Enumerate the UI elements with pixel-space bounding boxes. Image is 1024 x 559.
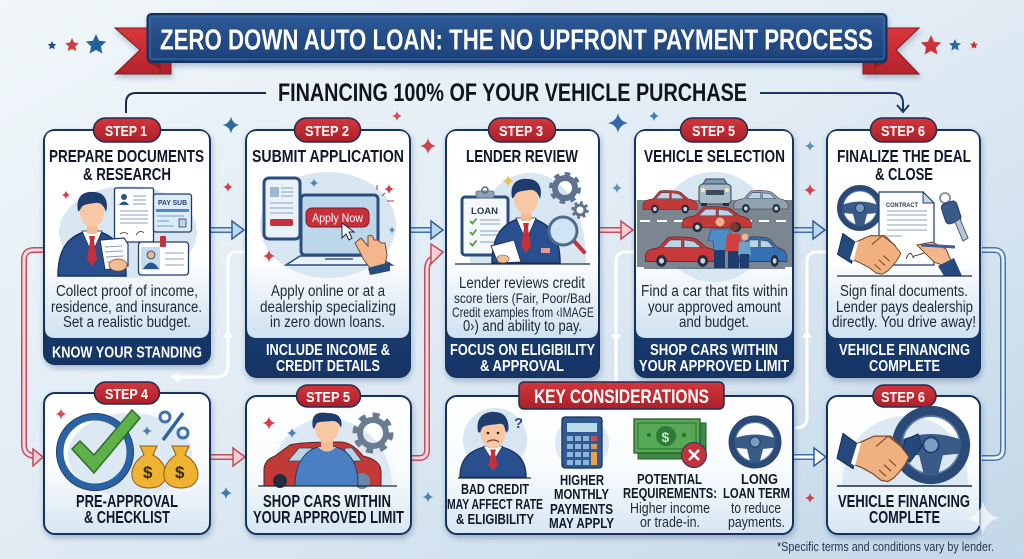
icon: person with documents <box>58 186 197 278</box>
icon: approval check and money bags <box>56 408 198 497</box>
icon: worried person: ? <box>514 415 523 432</box>
step 3 badge <box>488 118 556 142</box>
step 4 label <box>76 491 178 527</box>
finalize heading <box>837 146 971 184</box>
vehicle selection footer: SHOP CARS WITHIN <box>650 342 778 359</box>
step 5 label: YOUR APPROVED LIMIT <box>253 507 404 527</box>
panel: step 6 complete <box>827 385 980 534</box>
step 3 text: 0›) and ability to pay. <box>463 318 582 335</box>
vehicle selection heading: VEHICLE SELECTION <box>644 146 785 166</box>
icon: approval check and money bags: $ <box>143 463 153 482</box>
step 2 badge: STEP 2 <box>305 124 349 140</box>
panel: step 4 <box>44 382 210 534</box>
finalize text: Lender pays dealership <box>836 299 973 316</box>
key considerations header: KEY CONSIDERATIONS <box>534 386 709 408</box>
icon: cash with cross: $ <box>662 429 670 445</box>
icon: calculator <box>555 416 609 470</box>
higher payments label: MAY APPLY <box>549 516 614 532</box>
step 2 text <box>260 283 396 331</box>
potential requirements label: Higher income <box>630 501 710 517</box>
potential requirements label: or trade-in. <box>640 515 700 531</box>
finalize text: Sign final documents. <box>840 283 968 300</box>
step 2 text: dealership specializing <box>260 299 396 316</box>
potential requirements label: REQUIREMENTS: <box>623 486 717 502</box>
higher payments label: PAYMENTS <box>550 502 613 518</box>
long loan term label: LONG <box>741 472 778 488</box>
step 6 badge: STEP 6 <box>881 390 925 406</box>
long loan term label <box>723 472 790 531</box>
step 2 heading: SUBMIT APPLICATION <box>252 146 404 166</box>
step 2 text: Apply online or at a <box>271 283 385 300</box>
step 5 label: SHOP CARS WITHIN <box>263 491 391 511</box>
vehicle selection text <box>641 283 788 331</box>
step 3 text: Lender reviews credit <box>459 275 586 292</box>
icon: worried person <box>458 408 531 478</box>
vehicle selection text: your approved amount <box>648 299 782 316</box>
decorative sparkles <box>220 111 816 503</box>
vehicle selection footer: YOUR APPROVED LIMIT <box>639 358 789 375</box>
step 3 footer: FOCUS ON ELIGIBILITY <box>450 342 595 359</box>
step 4 label: & CHECKLIST <box>84 507 170 527</box>
arrow: step 2 to step 3 <box>411 221 443 239</box>
panel: step 6 finalize <box>827 118 980 377</box>
step 3 text <box>452 275 594 335</box>
step 1 heading: & RESEARCH <box>83 164 171 184</box>
bad credit label: BAD CREDIT <box>461 482 529 498</box>
icon: lender with clipboard and magnifier: LOAN <box>471 206 498 216</box>
finalize badge <box>870 118 936 142</box>
step 1 footer: KNOW YOUR STANDING <box>52 344 202 362</box>
icon: application on devices <box>260 172 396 278</box>
potential requirements label <box>623 472 717 531</box>
icon: corner sparkle <box>966 501 1000 535</box>
step 2 footer: CREDIT DETAILS <box>276 358 380 375</box>
finalize footer: COMPLETE <box>869 358 940 375</box>
title ribbon <box>115 14 919 74</box>
connector arrows <box>24 93 1003 466</box>
step 1 badge: STEP 1 <box>105 124 147 140</box>
finalize badge: STEP 6 <box>881 124 925 140</box>
arrow: considerations to step 6 <box>794 448 826 466</box>
potential requirements label: POTENTIAL <box>637 472 702 488</box>
panel: step 3 <box>446 118 599 377</box>
arrow: step 3 to vehicle selection <box>600 221 633 239</box>
finalize heading: FINALIZE THE DEAL <box>837 146 971 166</box>
subtitle: FINANCING 100% OF YOUR VEHICLE PURCHASE <box>278 79 747 107</box>
icon: stars right <box>921 35 978 54</box>
icon: buyer with car and gear <box>258 413 397 489</box>
vehicle selection footer <box>639 342 789 375</box>
icon: contract, wheel, key and handshake <box>837 188 972 276</box>
icon: contract, wheel, key and handshake: CONTRACT <box>886 202 918 209</box>
arrow: step 1 to step 2 <box>211 221 244 239</box>
panel: step 2 <box>246 118 410 377</box>
higher payments label: HIGHER <box>560 473 604 489</box>
icon: handshake and steering wheel <box>837 411 972 486</box>
arrow: vehicle selection to finalize <box>794 221 825 239</box>
step 5 label <box>253 491 404 527</box>
arrow: step 4 to step 5 <box>211 448 245 466</box>
icon: cars and family on road <box>637 172 792 282</box>
vehicle selection badge: STEP 5 <box>692 124 735 140</box>
step 2 badge <box>294 118 360 142</box>
step 4 badge: STEP 4 <box>105 387 148 403</box>
finalize text <box>832 283 976 331</box>
step 6 badge <box>873 385 936 407</box>
long loan term label: to reduce <box>731 501 781 517</box>
step 3 footer <box>450 342 595 375</box>
long loan term label: LOAN TERM <box>723 486 790 502</box>
step 5 badge: STEP 5 <box>306 390 350 406</box>
icon: application on devices: Apply Now <box>312 213 364 225</box>
icon: stars left <box>48 34 106 54</box>
finalize footer: VEHICLE FINANCING <box>839 342 970 359</box>
panel: step 5 shop <box>246 385 411 534</box>
step 1 badge <box>94 118 160 142</box>
step 2 footer <box>266 342 390 375</box>
step 3 badge: STEP 3 <box>499 124 543 140</box>
footnote: *Specific terms and conditions vary by lender. <box>777 540 994 554</box>
vehicle selection badge <box>680 118 748 142</box>
step 2 footer: INCLUDE INCOME & <box>266 342 390 359</box>
step 5 badge <box>296 385 360 407</box>
key considerations header <box>519 382 724 409</box>
step 1 text: Collect proof of income, <box>56 283 198 300</box>
step 1 text <box>51 283 202 331</box>
step 6 label: VEHICLE FINANCING <box>838 491 970 511</box>
panel: key considerations <box>446 382 793 534</box>
bad credit label <box>447 482 543 528</box>
icon: approval check and money bags: $ <box>175 463 185 482</box>
icon: person with documents: PAY SUB <box>158 200 187 207</box>
icon: cash with cross <box>634 419 706 468</box>
panel: vehicle selection <box>635 118 793 377</box>
step 1 heading: PREPARE DOCUMENTS <box>49 146 204 166</box>
step 4 badge <box>94 382 160 404</box>
step 3 text: score tiers (Fair, Poor/Bad <box>454 290 591 306</box>
bad credit label: & ELIGIBILITY <box>456 512 534 528</box>
bad credit label: MAY AFFECT RATE <box>447 497 543 513</box>
higher payments label <box>549 473 614 532</box>
panel: step 1 <box>44 118 210 364</box>
vehicle selection text: Find a car that fits within <box>641 283 788 300</box>
finalize heading: & CLOSE <box>875 164 933 184</box>
icon: lender with clipboard and magnifier <box>455 173 590 264</box>
step 1 text: Set a realistic budget. <box>63 314 191 331</box>
step 3 footer: & APPROVAL <box>480 358 564 375</box>
long loan term label: payments. <box>728 515 785 531</box>
step 1 heading <box>49 146 204 184</box>
step 6 label: COMPLETE <box>869 507 940 527</box>
finalize footer <box>839 342 970 375</box>
step 1 text: residence, and insurance. <box>51 299 202 316</box>
vehicle selection text: and budget. <box>679 314 749 331</box>
finalize text: directly. You drive away! <box>832 314 976 331</box>
step 6 label <box>838 491 970 527</box>
step 3 heading: LENDER REVIEW <box>466 146 578 166</box>
icon: steering wheel <box>732 419 778 465</box>
step 4 label: PRE-APPROVAL <box>76 491 178 511</box>
step 3 text: Credit examples from ‹IMAGE <box>452 304 594 320</box>
higher payments label: MONTHLY <box>554 487 609 503</box>
step 2 text: in zero down loans. <box>270 314 385 331</box>
